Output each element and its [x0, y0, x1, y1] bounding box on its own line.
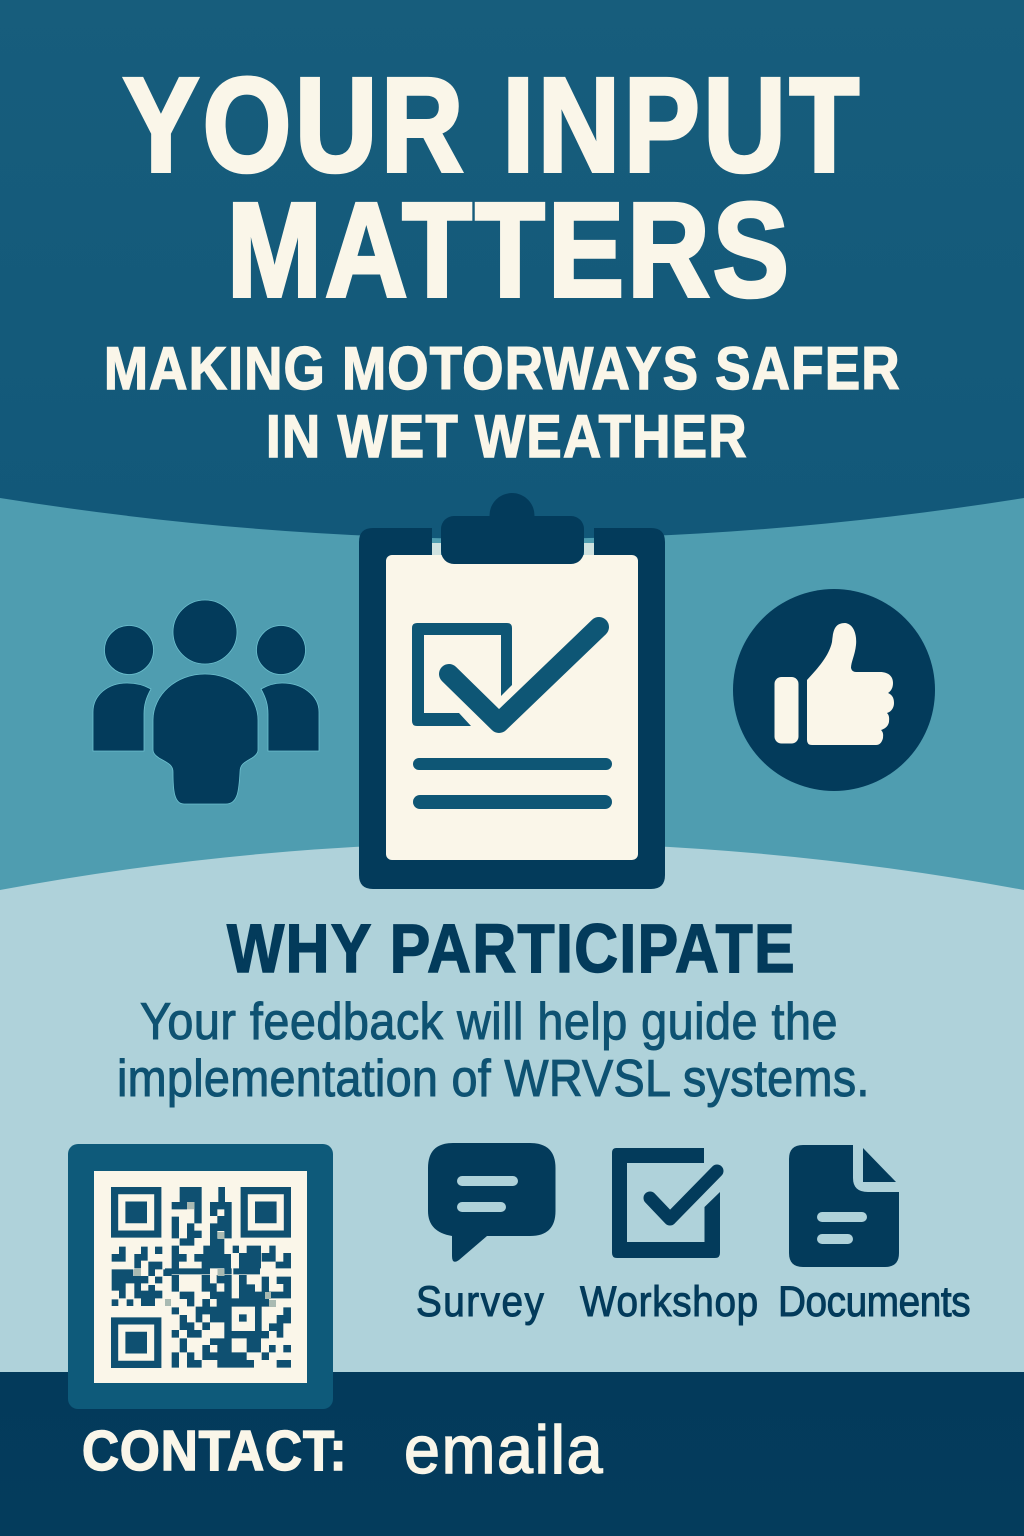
footer band [0, 1372, 1024, 1536]
title [123, 50, 859, 325]
QR code panel [68, 1144, 333, 1409]
QR modules upper [165, 1187, 291, 1274]
clipboard frame [359, 528, 665, 889]
body text: implementation of WRVSL systems. [117, 1050, 869, 1108]
heading: why participate: WHY PARTICIPATE [227, 909, 795, 987]
clipboard clip [441, 493, 584, 564]
label: documents: Documents [778, 1277, 971, 1325]
title: YOUR INPUT [123, 50, 859, 200]
top band [0, 0, 1024, 539]
text line two [413, 795, 612, 809]
label: survey: Survey [416, 1277, 544, 1325]
body text: Your feedback will help guide the [140, 993, 838, 1051]
QR modules lower [172, 1275, 291, 1368]
mid band background [0, 440, 1024, 940]
subtitle: MAKING MOTORWAYS SAFER [104, 335, 900, 402]
icon: clipboard with checkmark [359, 493, 665, 889]
subtitle [104, 335, 900, 470]
QR code [111, 1187, 291, 1368]
icon: workshop checkbox [612, 1148, 720, 1258]
clipboard paper [386, 555, 638, 860]
body text [117, 993, 869, 1108]
QR finder patterns [111, 1187, 291, 1368]
icon: survey speech bubble [428, 1143, 556, 1262]
subtitle: IN WET WEATHER [266, 403, 746, 470]
check mark [449, 627, 599, 723]
contact label: CONTACT: [82, 1420, 347, 1483]
contact email: emaila [404, 1413, 603, 1488]
QR blurred modules [134, 1202, 276, 1307]
text line one [413, 758, 612, 770]
QR modules left [112, 1247, 172, 1306]
icon: thumbs up [733, 589, 935, 791]
light lower band [0, 842, 1024, 1536]
icon: document [789, 1145, 899, 1267]
clipboard notch highlights [432, 543, 594, 556]
check box [412, 623, 512, 726]
title: MATTERS [227, 175, 789, 325]
icon: people group [93, 600, 319, 804]
label: workshop: Workshop [580, 1277, 758, 1325]
